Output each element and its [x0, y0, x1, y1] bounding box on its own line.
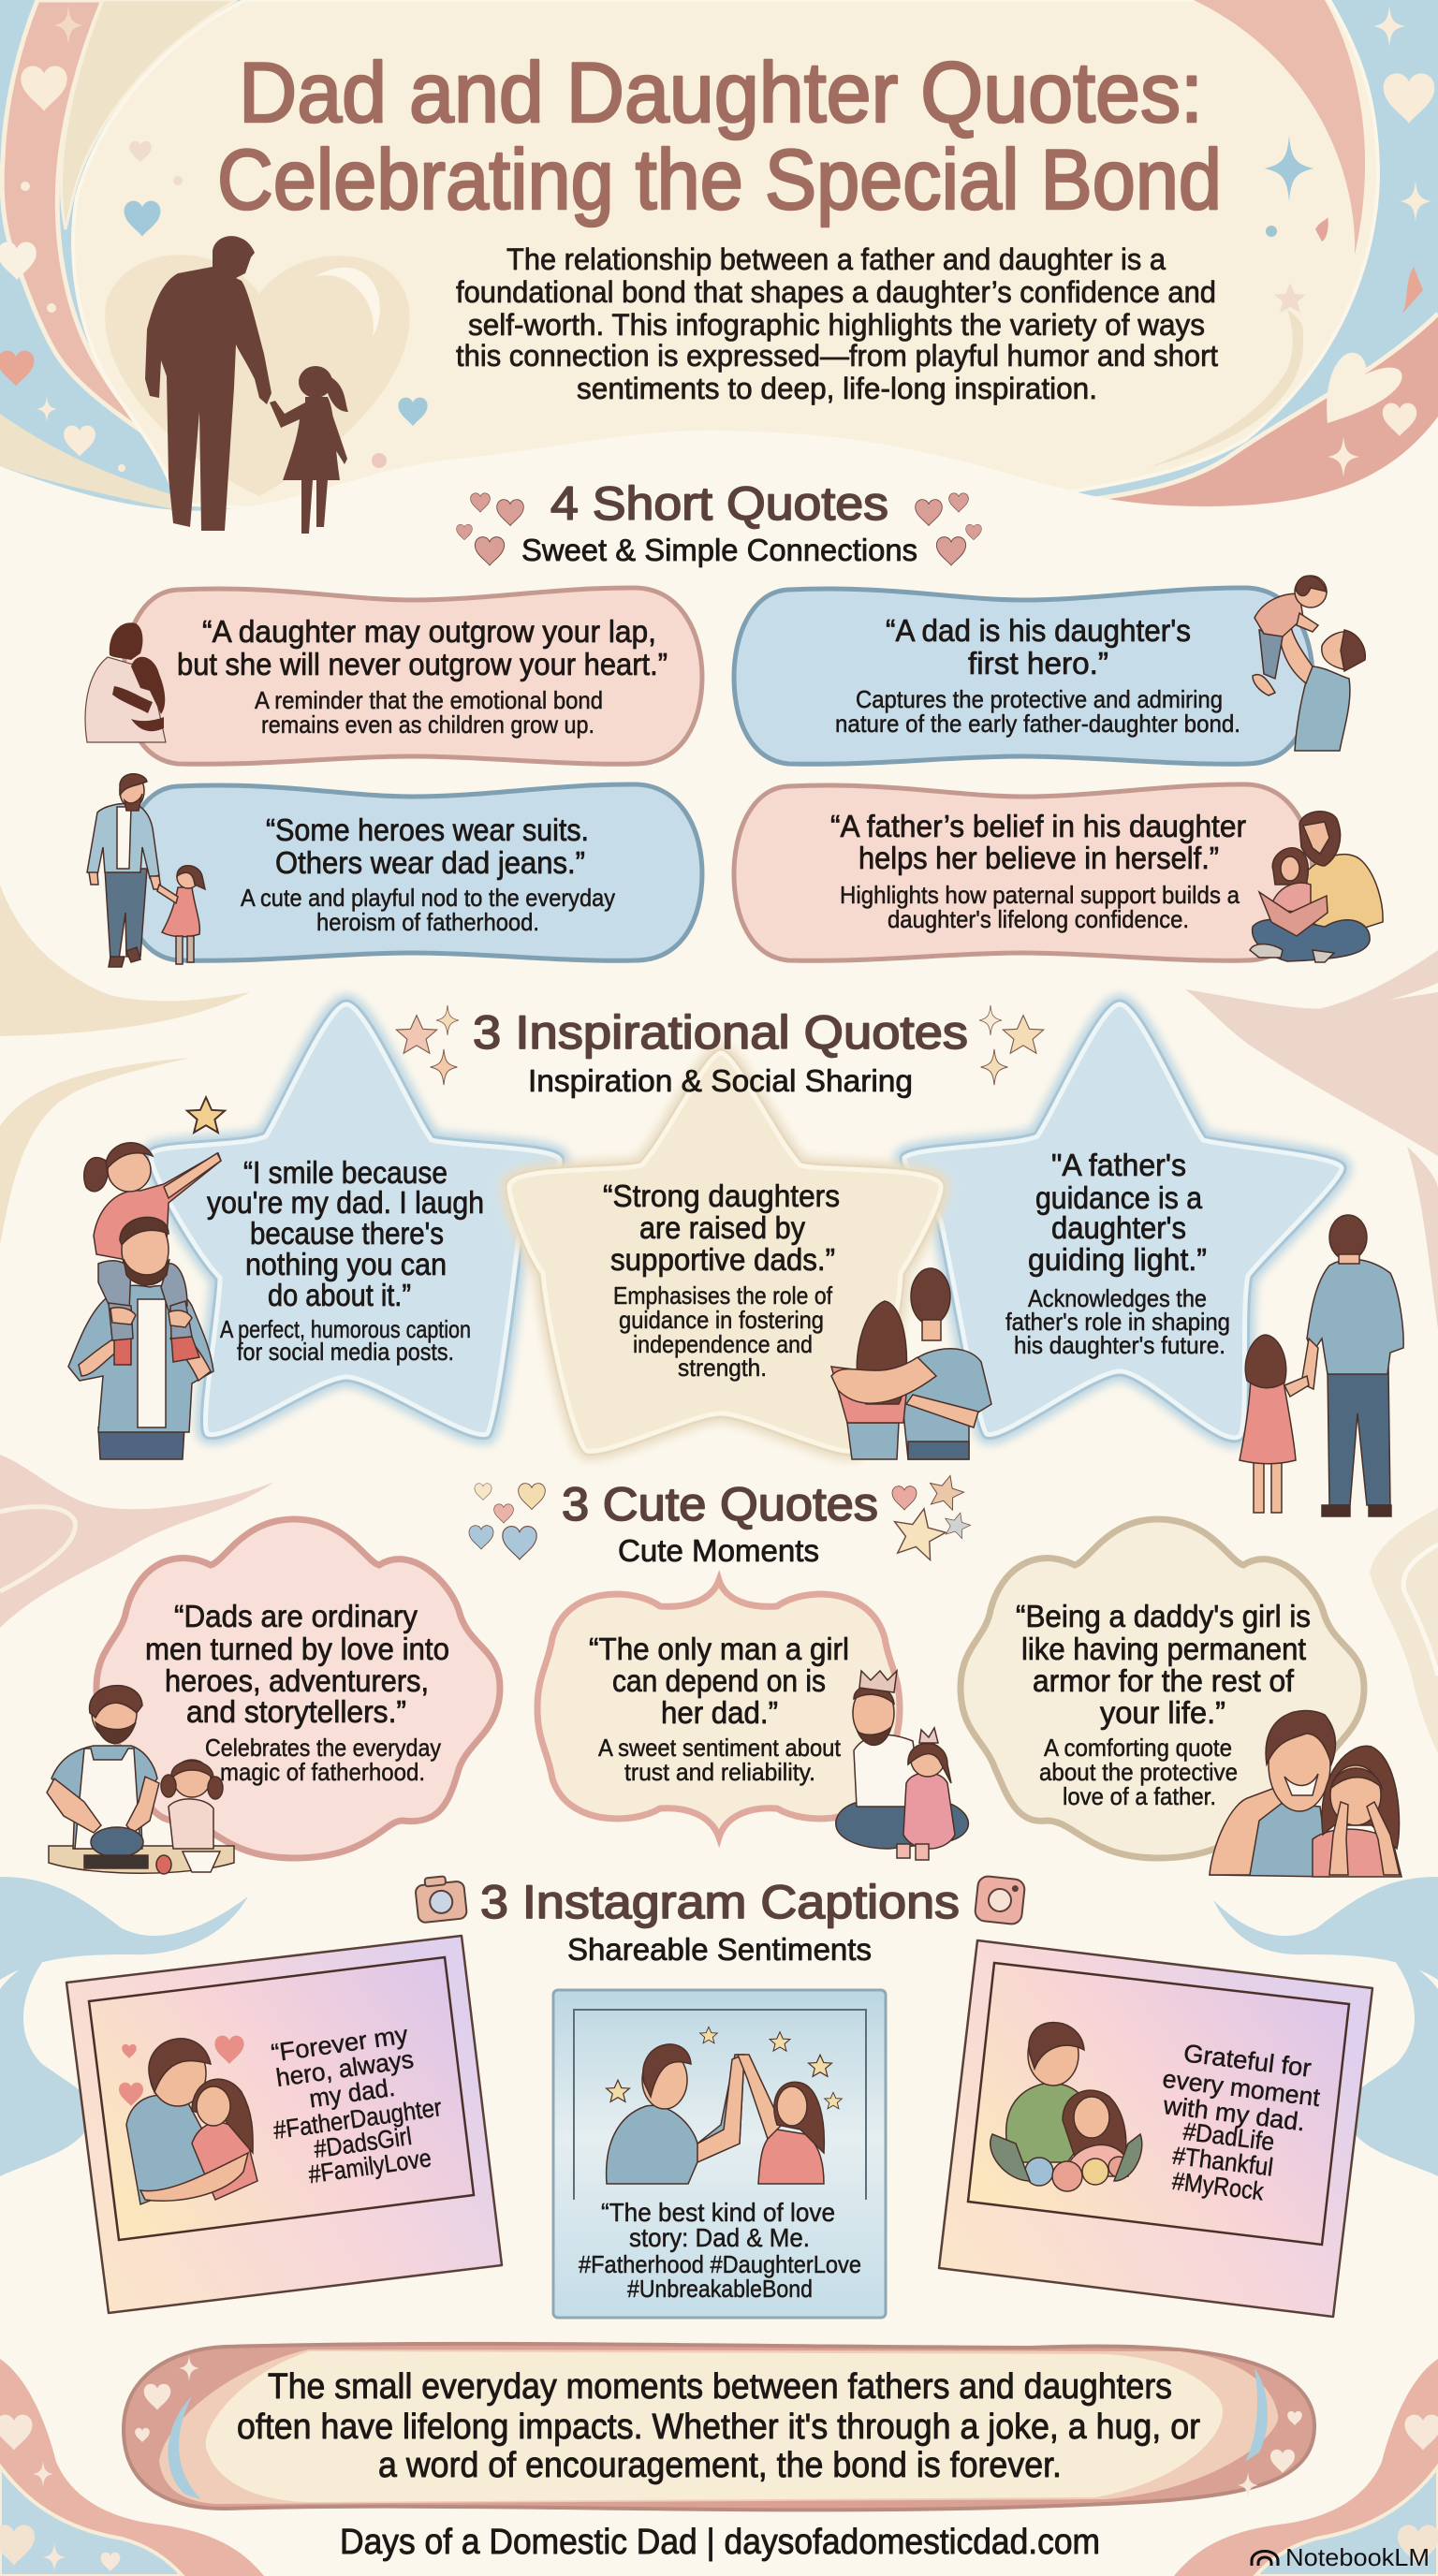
panel: right star [904, 1004, 1342, 1438]
title: Celebrating the Special Bond [217, 133, 1222, 227]
caption text: #FamilyLove [307, 2144, 433, 2188]
mid-page side decorations [0, 885, 1438, 1753]
panel: cute quote left: and storytellers.” [186, 1694, 406, 1729]
introduction text: this connection is expressed—from playful humor and short [456, 339, 1218, 373]
panel: center star: independence and [633, 1330, 813, 1358]
section heading: inspirational quotes: Inspiration & Social Sharing [528, 1063, 913, 1098]
panel: cute quote right: your life.” [1100, 1695, 1225, 1730]
icon: parent hugging child [85, 622, 166, 742]
section heading: instagram captions [415, 1874, 1025, 1967]
panel: right star: "A father's [1051, 1148, 1186, 1182]
panel: quote 2: “A dad is his daughter's [886, 613, 1191, 648]
panel: cute quote right: like having permanent [1021, 1632, 1306, 1666]
panel: cute quote left: men turned by love into [145, 1632, 449, 1666]
caption text: Grateful for [1182, 2039, 1313, 2083]
instagram card center [553, 1990, 886, 2318]
icon: dad cooking with daughter [47, 1686, 234, 1874]
caption text: my dad. [307, 2073, 397, 2113]
caption text: #UnbreakableBond [627, 2275, 813, 2303]
panel: quote 1: but she will never outgrow your heart.” [177, 647, 668, 681]
icon: stars left [396, 1005, 459, 1085]
icon: stars right [979, 1005, 1044, 1085]
panel: cute quote middle [537, 1580, 968, 1860]
icon: hearts left [457, 493, 523, 565]
icon: dad lifting child [1253, 576, 1365, 751]
caption text: “Forever my [270, 2020, 410, 2068]
introduction text [456, 242, 1218, 405]
caption text: with my dad. [1161, 2091, 1307, 2136]
panel: right star: his daughter's future. [1014, 1331, 1225, 1359]
icon: hearts right [916, 493, 981, 565]
panel: center star: “Strong daughters [603, 1178, 840, 1213]
panel: quote 3 [87, 774, 702, 967]
footer credit: Days of a Domestic Dad | daysofadomesticdad.com [340, 2523, 1100, 2562]
panel: right star: father's role in shaping [1005, 1308, 1230, 1336]
icon: camera left [415, 1874, 467, 1923]
panel: right star: Acknowledges the [1028, 1284, 1207, 1312]
panel: cute quote right: about the protective [1039, 1758, 1238, 1786]
panel: left star: you're my dad. I laugh [207, 1185, 484, 1220]
panel: left star: because there's [250, 1216, 444, 1251]
icon: girl on dad's shoulders [68, 1097, 225, 1459]
bottom decorations [0, 2359, 1438, 2576]
panel: cute quote middle: her dad.” [661, 1695, 778, 1730]
panel: quote 3: “Some heroes wear suits. [266, 812, 589, 847]
panel: cute quote left: Celebrates the everyday [205, 1734, 441, 1762]
panel: right star: guiding light.” [1028, 1242, 1207, 1277]
lower side decorations [0, 1877, 1438, 2176]
hero hearts and sparkles [0, 6, 1434, 477]
panel: right star: daughter's [1051, 1210, 1186, 1245]
panel: cute quote right: armor for the rest of [1033, 1663, 1295, 1698]
section heading: instagram captions: 3 Instagram Captions [480, 1876, 960, 1928]
panel: quote 3: A cute and playful nod to the everyday [241, 884, 615, 912]
panel: cute quote right [961, 1519, 1401, 1877]
instagram card right [939, 1940, 1372, 2317]
panel: left star: nothing you can [245, 1247, 447, 1281]
panel: right star: guidance is a [1035, 1180, 1203, 1215]
closing banner: The small everyday moments between fathers and daughters [268, 2367, 1172, 2407]
panel: cute quote left: magic of fatherhood. [220, 1758, 425, 1786]
caption text: #DadLife [1181, 2117, 1276, 2157]
closing banner [124, 2344, 1314, 2510]
icon: dad and daughter with flowers [990, 2023, 1142, 2191]
introduction text: self-worth. This infographic highlights the variety of ways [468, 308, 1205, 342]
section heading: inspirational quotes: 3 Inspirational Quotes [473, 1006, 968, 1059]
caption text: every moment [1161, 2065, 1322, 2112]
panel: quote 1: “A daughter may outgrow your lap, [202, 614, 656, 649]
section heading: short quotes: Sweet & Simple Connections [521, 533, 917, 567]
title: Dad and Daughter Quotes: [239, 46, 1203, 140]
panel: left star [151, 1004, 560, 1435]
panel: center star: guidance in fostering [619, 1306, 824, 1334]
panel: quote 2: Captures the protective and admiring [856, 685, 1223, 713]
caption text [261, 2017, 450, 2193]
panel: quote 1: remains even as children grow up. [261, 710, 594, 739]
panel: cute quote middle: trust and reliability. [624, 1758, 815, 1786]
panel: left star: A perfect, humorous caption [220, 1315, 471, 1343]
icon: dad and daughter smiling [1210, 1710, 1401, 1877]
panel: center star: are raised by [639, 1210, 805, 1245]
closing banner: a word of encouragement, the bond is forever. [378, 2446, 1062, 2485]
icon: dad hugging daughter [119, 2036, 257, 2204]
notebooklm mark: NotebookLM [1285, 2543, 1430, 2571]
caption text: #FatherDaughter [271, 2093, 444, 2144]
title [217, 46, 1222, 227]
hero background swirl [0, 0, 1438, 599]
icon: dad and daughter walking [87, 774, 205, 967]
panel: center star [509, 1053, 941, 1451]
caption text: #Thankful [1171, 2142, 1275, 2182]
icon: dad and daughter with crowns [836, 1671, 968, 1860]
panel: left star: “I smile because [243, 1155, 448, 1190]
panel: quote 4: daughter's lifelong confidence. [888, 905, 1189, 933]
panel: left star: do about it.” [268, 1278, 411, 1312]
panel: quote 4: helps her believe in herself.” [858, 841, 1219, 875]
introduction text: sentiments to deep, life-long inspiration. [577, 372, 1097, 405]
icon: high five [607, 2027, 842, 2184]
panel: center star: strength. [678, 1354, 767, 1382]
panel: quote 3: Others wear dad jeans.” [275, 845, 585, 880]
icon: hearts left [469, 1484, 545, 1559]
caption text: #Fatherhood #DaughterLove [579, 2250, 861, 2278]
icon: dad reading with daughter [1250, 812, 1383, 962]
panel: cute quote left: heroes, adventurers, [165, 1663, 429, 1698]
section heading: short quotes: 4 Short Quotes [550, 477, 888, 530]
caption text [1149, 2037, 1326, 2211]
panel: quote 2 [734, 576, 1365, 764]
heart behind silhouette [105, 255, 409, 496]
icon: couple seen from behind [831, 1268, 991, 1459]
introduction text: foundational bond that shapes a daughter’s confidence and [456, 275, 1216, 309]
panel: quote 4: “A father’s belief in his daughter [830, 809, 1246, 843]
panel: quote 4 [734, 784, 1383, 962]
panel: cute quote right: love of a father. [1063, 1782, 1216, 1810]
panel: center star: Emphasises the role of [613, 1281, 833, 1310]
caption text: #MyRock [1170, 2167, 1266, 2206]
caption text: hero, always [274, 2045, 416, 2092]
caption text [579, 2198, 861, 2303]
instagram card left [66, 1936, 502, 2313]
panel: cute quote left [47, 1519, 500, 1874]
icon: camera right [975, 1876, 1025, 1925]
closing banner: often have lifelong impacts. Whether it's through a joke, a hug, or [237, 2408, 1200, 2447]
panel: cute quote middle: can depend on is [612, 1663, 826, 1698]
panel: cute quote middle: “The only man a girl [589, 1632, 849, 1666]
caption text: #DadsGirl [312, 2122, 414, 2163]
section heading: short quotes [457, 477, 981, 567]
panel: quote 2: nature of the early father-daughter bond. [835, 710, 1240, 738]
section heading: cute quotes: Cute Moments [618, 1533, 819, 1568]
panel: cute quote right: “Being a daddy's girl is [1016, 1599, 1311, 1633]
icon: stars and heart right [888, 1471, 973, 1562]
caption text: story: Dad & Me. [629, 2223, 810, 2252]
panel: quote 4: Highlights how paternal support builds a [840, 881, 1240, 909]
panel: cute quote right: A comforting quote [1044, 1734, 1232, 1762]
panel: quote 1: A reminder that the emotional bond [255, 686, 603, 714]
panel: center star: supportive dads.” [610, 1242, 835, 1277]
section heading: instagram captions: Shareable Sentiments [567, 1932, 872, 1967]
icon: father and daughter silhouette [145, 236, 348, 534]
caption text: “The best kind of love [601, 2198, 835, 2227]
panel: quote 1 [85, 588, 702, 764]
panel: left star: for social media posts. [237, 1338, 454, 1366]
section heading: cute quotes [469, 1471, 973, 1568]
panel: cute quote middle: A sweet sentiment about [598, 1734, 842, 1762]
panel: quote 3: heroism of fatherhood. [316, 908, 539, 936]
section heading: inspirational quotes [151, 1004, 1342, 1451]
icon: dad and daughter from behind [1240, 1215, 1403, 1516]
section heading: cute quotes: 3 Cute Quotes [562, 1478, 878, 1530]
introduction text: The relationship between a father and daughter is a [506, 242, 1166, 276]
panel: quote 2: first hero.” [968, 646, 1108, 681]
panel: cute quote left: “Dads are ordinary [174, 1599, 418, 1633]
